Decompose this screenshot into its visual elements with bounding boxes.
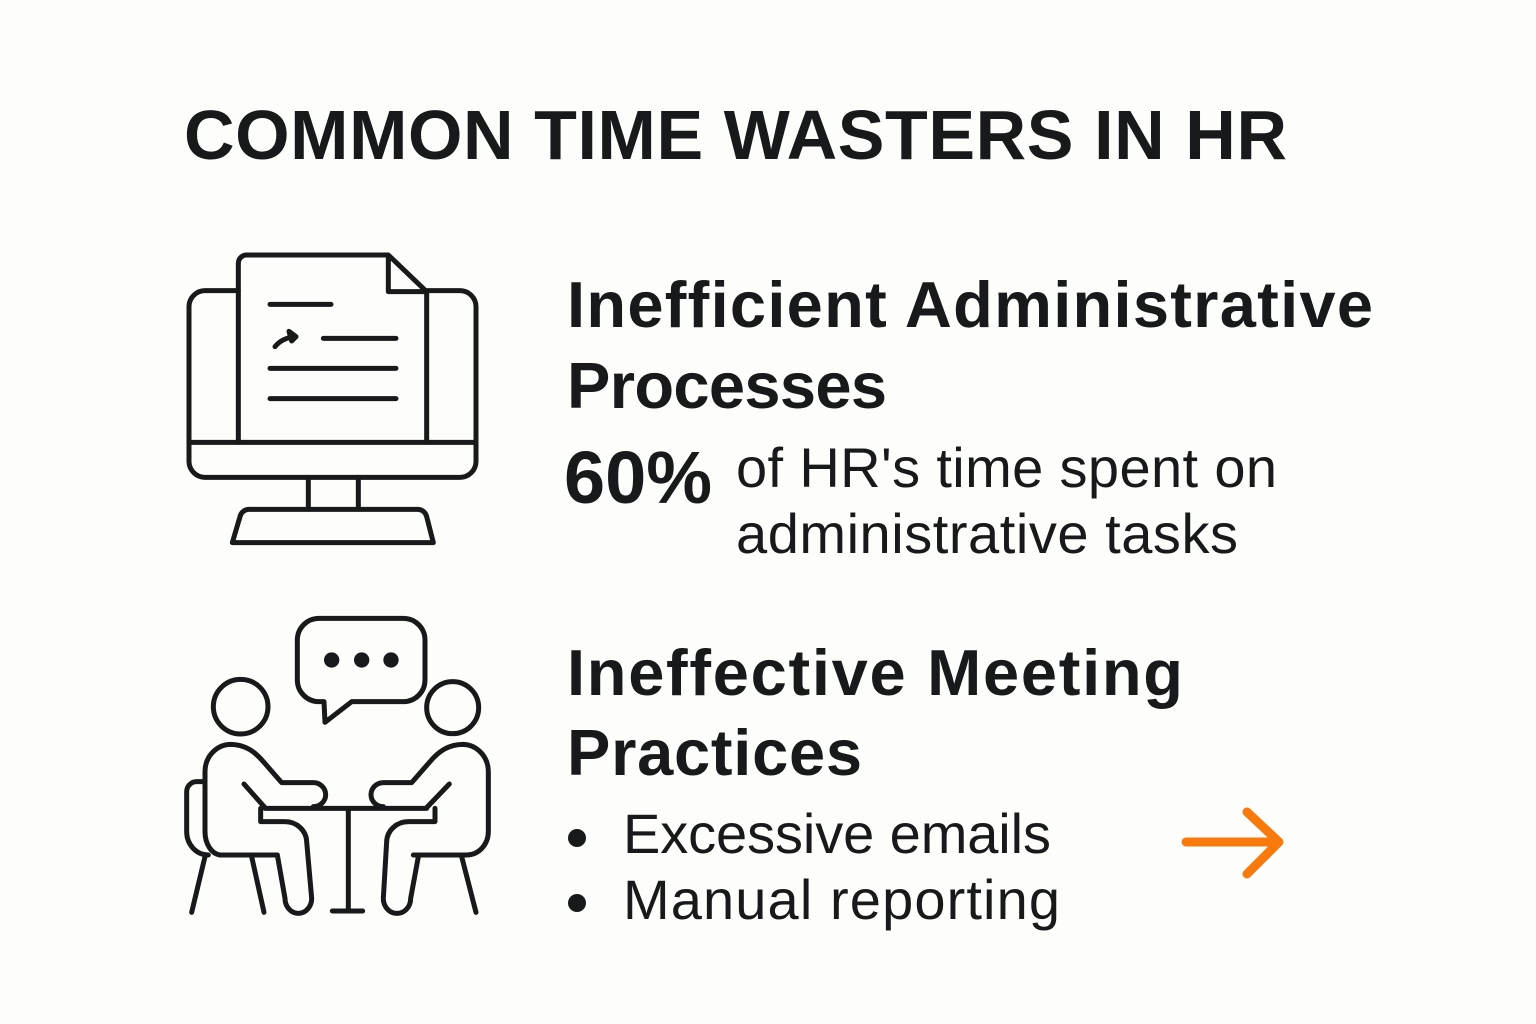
statistic description: of HR's time spent on: [736, 436, 1277, 499]
heading: ineffective meeting practices: Ineffective Meeting: [567, 636, 1183, 709]
table: [265, 808, 427, 911]
statistic description: [736, 436, 1277, 565]
right person: [371, 682, 488, 913]
speech bubble: [297, 618, 425, 722]
statistic description: administrative tasks: [736, 502, 1238, 565]
icon: orange arrow: [1186, 812, 1279, 874]
heading: inefficient administrative processes: [567, 268, 1373, 422]
statistic: 60%: 60%: [564, 436, 712, 519]
bullet list: Excessive emails: [623, 802, 1051, 865]
speech dots: [324, 652, 399, 668]
bullet list: Manual reporting: [623, 868, 1060, 931]
icon: two people meeting at a table: [187, 618, 488, 913]
title: COMMON TIME WASTERS IN HR: [184, 96, 1287, 174]
heading: ineffective meeting practices: [567, 636, 1183, 789]
heading: ineffective meeting practices: Practices: [567, 716, 862, 789]
bullet list: [568, 802, 1060, 931]
left person: [187, 679, 326, 913]
heading: inefficient administrative processes: Processes: [567, 349, 887, 422]
icon: computer monitor with document: [189, 255, 476, 543]
heading: inefficient administrative processes: Inefficient Administrative: [567, 268, 1373, 341]
